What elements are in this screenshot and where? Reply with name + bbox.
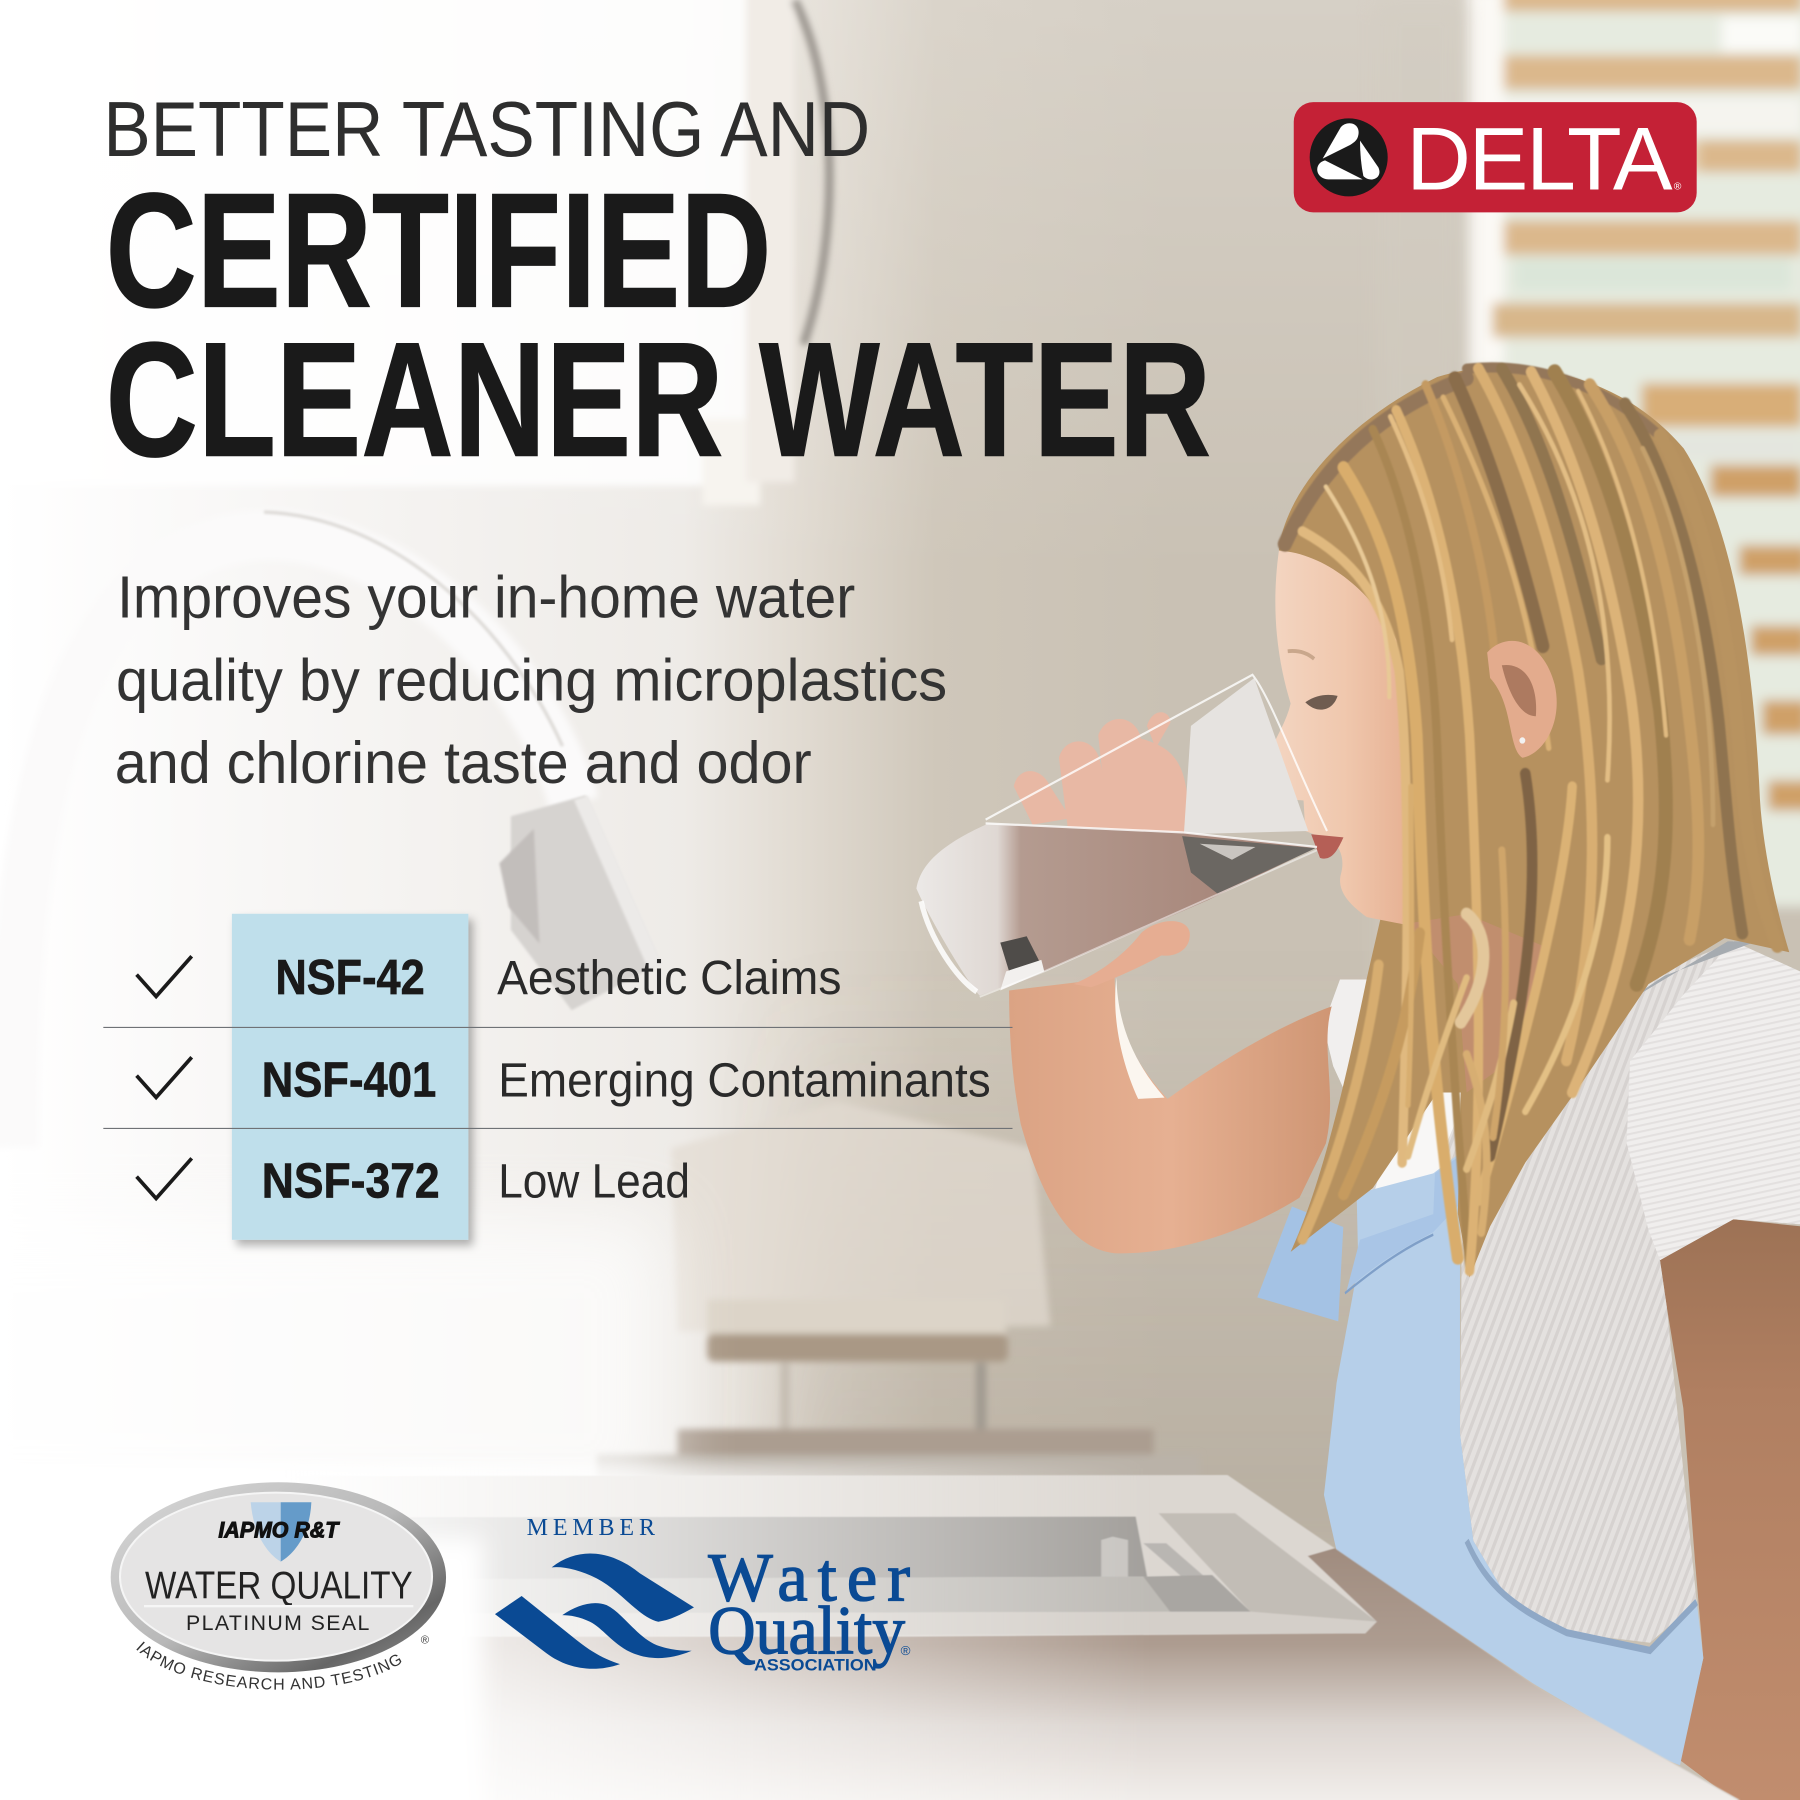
IAPMO water quality seal: ® (421, 1634, 430, 1646)
neck (1408, 914, 1543, 1093)
lower body traced in reference coordinates (1257, 941, 1800, 1800)
icon: delta triangle (1310, 118, 1388, 196)
blue column (232, 914, 468, 1240)
IAPMO water quality seal (110, 1482, 446, 1690)
ear (1487, 641, 1557, 758)
seal text: PLATINUM SEAL (186, 1611, 369, 1635)
seal text (145, 1518, 413, 1635)
description text: and chlorine taste and odor (115, 729, 812, 796)
wordmark: DELTA (1406, 108, 1673, 208)
title line: cleaner water: CLEANER WATER (106, 308, 1211, 491)
back hair (1279, 367, 1789, 1277)
description text (115, 564, 947, 796)
thumb (1074, 921, 1190, 987)
claim labels: Aesthetic Claims (497, 951, 841, 1005)
countertop (0, 1475, 1740, 1800)
Water Quality Association member logo (495, 1515, 911, 1675)
description text: Improves your in-home water (117, 564, 855, 631)
t-shirt body (1323, 941, 1800, 1643)
glass with water (916, 675, 1327, 997)
wordmark: ASSOCIATION (754, 1656, 877, 1675)
far arm (1660, 1219, 1800, 1800)
faded white tap (14, 512, 662, 1148)
seal oval (111, 1482, 446, 1672)
apron trim (1467, 1541, 1697, 1650)
wordmark (708, 1540, 911, 1675)
claim labels (497, 951, 991, 1208)
face (1261, 550, 1411, 925)
title line: better tasting and: BETTER TASTING AND (103, 85, 870, 173)
fingers (1014, 712, 1188, 834)
counter and sink (0, 1464, 1740, 1800)
claim labels: Low Lead (498, 1154, 690, 1208)
white collar (1363, 1082, 1473, 1229)
hair strands (1285, 367, 1778, 1271)
claim labels: Emerging Contaminants (498, 1053, 991, 1107)
apron (1324, 1153, 1703, 1765)
girl traced in reference coordinates (916, 367, 1789, 1277)
icon: waves (495, 1554, 694, 1669)
sink basin (217, 1517, 1147, 1580)
NSF codes: NSF-401 (262, 1052, 436, 1107)
window with wooden blinds (1467, 0, 1800, 907)
Delta logo (1294, 102, 1697, 212)
NSF codes: NSF-372 (262, 1153, 440, 1208)
NSF codes: NSF-42 (276, 950, 425, 1005)
NSF codes (262, 950, 440, 1208)
seal text: WATER QUALITY (145, 1564, 413, 1607)
t-shirt sleeve (1627, 941, 1800, 1260)
apron knot (1347, 1158, 1460, 1291)
member label: MEMBER (527, 1515, 655, 1541)
near arm (1009, 978, 1332, 1253)
certification table (103, 914, 1012, 1240)
apron strap (1613, 941, 1756, 1010)
title line: certified: CERTIFIED (106, 159, 771, 342)
photo: girl drinking water (916, 367, 1800, 1800)
wordmark: Quality (708, 1592, 905, 1668)
blurred counter objects (597, 1102, 1200, 1477)
upper cabinet and appliance edge (0, 0, 829, 505)
description text: quality by reducing microplastics (116, 646, 947, 713)
icon: shield (251, 1502, 311, 1562)
wooden counter surface (0, 1548, 1740, 1800)
Delta logo: ® (1674, 181, 1682, 192)
sink flange (1159, 1513, 1377, 1622)
wordmark: Water (708, 1540, 910, 1616)
wordmark: ® (901, 1643, 911, 1658)
eye and lips (1305, 695, 1338, 710)
near sleeve (1323, 979, 1377, 1153)
check marks (137, 956, 192, 1198)
apron tie (1257, 1207, 1343, 1321)
title (103, 85, 1211, 491)
seal text: IAPMO R&T (218, 1518, 340, 1543)
curved text: IAPMO RESEARCH AND TESTING (136, 1642, 402, 1690)
